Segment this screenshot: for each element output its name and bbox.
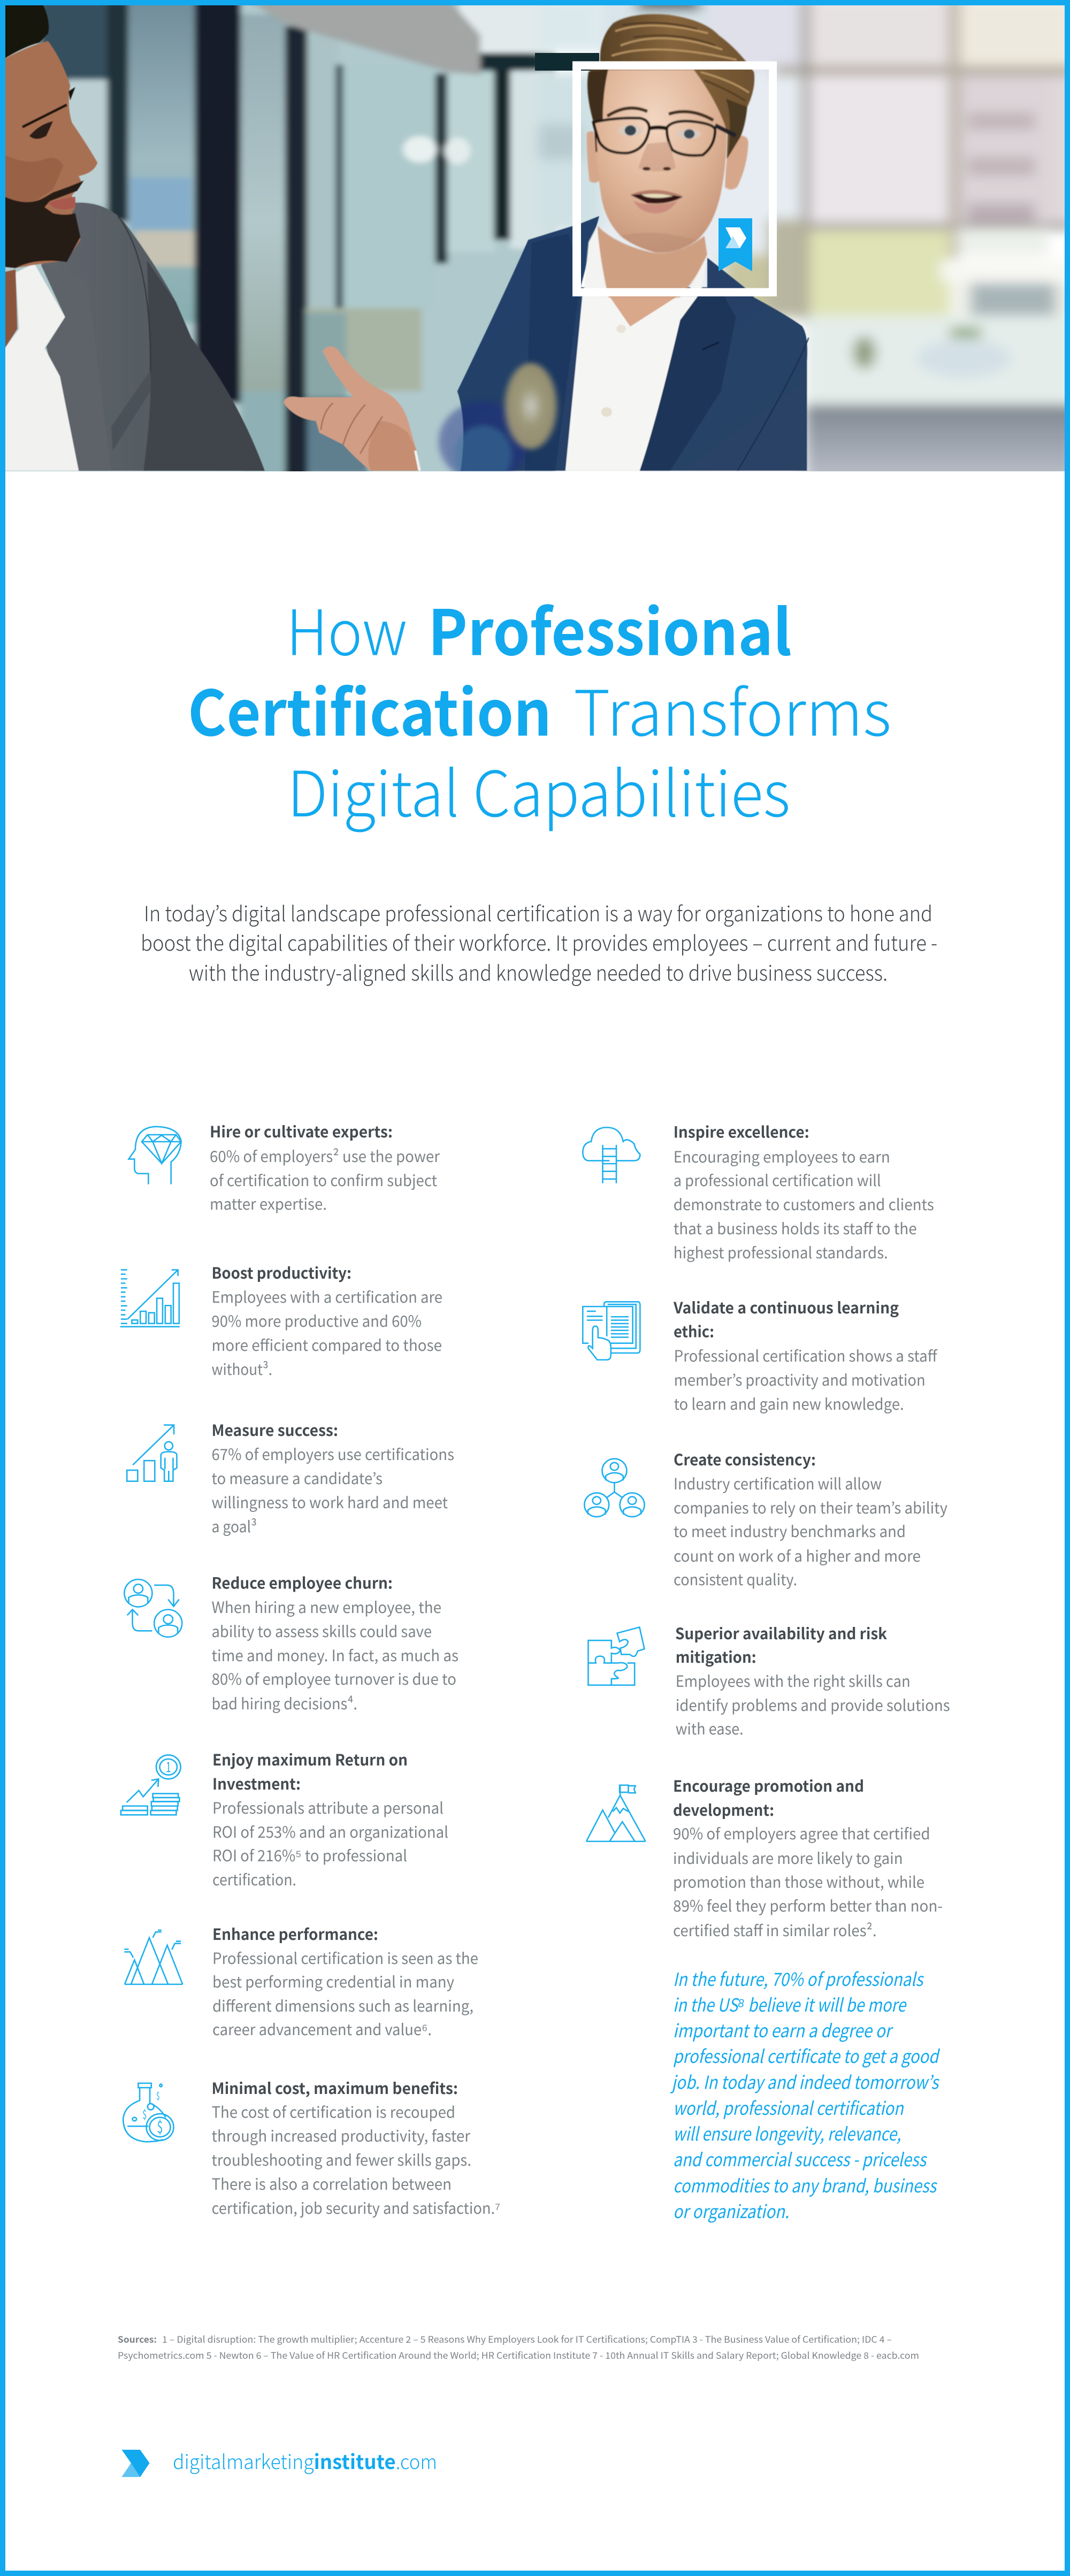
website address <box>173 2446 437 2475</box>
icon: coin stacks and rising arrow <box>121 1755 181 1815</box>
closing italic statement: will ensure longevity, relevance, <box>673 2120 901 2146</box>
icon: head with diamond <box>129 1127 181 1184</box>
closing italic statement: professional certificate to get a good <box>673 2042 940 2068</box>
text block: Inspire excellence: <box>674 1120 809 1143</box>
text block: ROI of 253% and an organizational <box>212 1820 448 1843</box>
text block: mitigation: <box>676 1645 756 1668</box>
text block: consistent quality. <box>674 1568 797 1590</box>
icon: flask with dollar coin: $ <box>142 2106 147 2122</box>
icon: bar chart with arrow <box>120 1270 180 1327</box>
text block: willingness to work hard and meet <box>212 1490 448 1513</box>
text block: Encouraging employees to earn <box>674 1145 890 1167</box>
text block: through increased productivity, faster <box>212 2124 471 2146</box>
text block: identify problems and provide solutions <box>676 1693 950 1716</box>
benefit: create consistency <box>584 1448 947 1590</box>
icon: three peaks <box>124 1930 182 1984</box>
text block: Industry certification will allow <box>674 1472 882 1494</box>
closing italic statement: world, professional certification <box>673 2094 904 2120</box>
text block: ability to assess skills could save <box>212 1619 432 1642</box>
benefit: encourage promotion <box>586 1774 943 1941</box>
text block <box>675 1622 950 1739</box>
text block <box>210 1120 440 1214</box>
text block: Professional certification is seen as the <box>212 1946 478 1969</box>
text block: Minimal cost, maximum benefits: <box>212 2076 458 2099</box>
icon: coin stacks and rising arrow: 1 <box>166 1756 171 1777</box>
closing italic statement: commodities to any brand, business <box>673 2172 938 2198</box>
closing italic statement: job. In today and indeed tomorrow’s <box>670 2068 940 2094</box>
text block: Employees with the right skills can <box>676 1669 911 1692</box>
text block: to learn and gain new knowledge. <box>674 1392 904 1415</box>
text block: Create consistency: <box>674 1448 816 1470</box>
photo background: right street and building <box>538 0 1070 481</box>
text block: a goal³ <box>212 1515 257 1537</box>
closing italic statement: in the US⁸ believe it will be more <box>673 1991 907 2017</box>
title: Transforms <box>574 663 891 754</box>
text block <box>674 1448 947 1590</box>
text block: ROI of 216%⁵ to professional <box>212 1844 407 1866</box>
left man: profile with beard and grey suit <box>2 0 265 471</box>
title: Certification <box>188 663 552 754</box>
text block: certification. <box>212 1868 296 1890</box>
text block: a professional certification will <box>674 1168 881 1191</box>
text block: to meet industry benchmarks and <box>674 1519 906 1542</box>
closing italic statement <box>670 1965 940 2223</box>
icon: tablet, document and pointing hand <box>583 1302 640 1360</box>
text block: 67% of employers use certifications <box>212 1442 454 1465</box>
text block: Enhance performance: <box>212 1922 378 1945</box>
closing italic statement: important to earn a degree or <box>673 2016 893 2043</box>
text block: There is also a correlation between <box>212 2172 452 2195</box>
text block: that a business holds its staff to the <box>674 1217 917 1239</box>
white photo frame <box>572 61 777 296</box>
text block: of certification to confirm subject <box>210 1168 437 1191</box>
text block: 89% feel they perform better than non- <box>673 1894 943 1916</box>
text block: certification, job security and satisfaction.⁷ <box>212 2196 500 2219</box>
text block: member’s proactivity and motivation <box>674 1368 926 1390</box>
text block: to measure a candidate’s <box>212 1466 383 1489</box>
benefit: measure success <box>127 1418 454 1537</box>
text block: Boost productivity: <box>212 1261 351 1283</box>
sources: 1 – Digital disruption: The growth multiplier; Accenture 2 – 5 Reasons Why Employers Look for IT Certifications; CompTIA 3 - The Business Value of Certification; IDC 4 – <box>162 2332 892 2345</box>
icon: person beside rising bars <box>127 1425 177 1481</box>
text block: with ease. <box>676 1717 744 1739</box>
text block: troubleshooting and fewer skills gaps. <box>212 2148 471 2170</box>
benefit: availability and risk mitigation <box>588 1622 950 1739</box>
icon: jigsaw puzzle <box>588 1627 645 1685</box>
benefit: inspire excellence <box>583 1120 934 1263</box>
benefit: reduce employee churn <box>124 1571 458 1714</box>
text block: 90% more productive and 60% <box>212 1309 422 1332</box>
text block: time and money. In fact, as much as <box>212 1644 458 1666</box>
text block <box>212 1571 458 1714</box>
text block: Validate a continuous learning <box>673 1296 899 1318</box>
text block: individuals are more likely to gain <box>673 1846 903 1869</box>
right man: head with glasses <box>583 14 754 297</box>
sources: Psychometrics.com 5 - Newton 6 – The Value of HR Certification Around the World; HR Certification Institute 7 - 10th Annual IT Skills and Salary Report; Global Knowledge 8 - eacb.com <box>118 2348 919 2361</box>
benefit: hire or cultivate experts <box>129 1120 440 1214</box>
icon: mountain with flag <box>586 1785 646 1841</box>
text block: Enjoy maximum Return on <box>212 1748 408 1770</box>
icon: flask with dollar coin <box>123 2083 174 2142</box>
header photo: two businessmen talking <box>0 0 1070 485</box>
text block: Measure success: <box>212 1418 338 1441</box>
benefit: enhance performance <box>124 1922 478 2040</box>
text block: different dimensions such as learning, <box>212 1994 473 2016</box>
text block: Professional certification shows a staff <box>674 1344 938 1366</box>
text block: Superior availability and risk <box>675 1622 887 1644</box>
text block: without³. <box>212 1357 272 1380</box>
text block: Reduce employee churn: <box>212 1571 393 1593</box>
closing italic statement: or organization. <box>673 2197 789 2223</box>
title: Professional <box>428 582 792 673</box>
beam behind the right man's hair <box>535 53 599 71</box>
icon: chevron mark <box>122 2450 150 2477</box>
title: Digital Capabilities <box>287 744 790 835</box>
text block: Employees with a certification are <box>212 1285 442 1308</box>
text block: ethic: <box>674 1319 714 1342</box>
right man: navy jacket and white shirt <box>457 216 808 471</box>
benefit: minimal cost <box>123 2076 500 2219</box>
text block: matter expertise. <box>210 1192 327 1214</box>
text block: 80% of employee turnover is due to <box>212 1667 456 1690</box>
closing italic statement: In the future, 70% of professionals <box>673 1965 924 1991</box>
text block <box>212 1418 454 1537</box>
sources: Sources: <box>118 2332 157 2345</box>
text block: certified staff in similar roles². <box>673 1918 876 1941</box>
text block <box>673 1774 943 1941</box>
text block: career advancement and value⁶. <box>212 2017 432 2040</box>
text block <box>212 1748 448 1890</box>
text block <box>212 2076 500 2219</box>
ribbon badge with chevron <box>719 218 752 271</box>
intro paragraph: boost the digital capabilities of their workforce. It provides employees – current and future - <box>141 927 937 957</box>
gesturing hand <box>284 346 421 471</box>
text block: best performing credential in many <box>212 1970 454 1992</box>
benefit: return on investment <box>121 1748 448 1890</box>
photo background: left glass office <box>0 0 555 483</box>
text block: demonstrate to customers and clients <box>674 1193 934 1215</box>
text block: The cost of certification is recouped <box>212 2100 455 2123</box>
icon: flask with dollar coin: $ <box>156 2089 160 2103</box>
icon: flask with dollar coin: $ <box>157 2115 163 2138</box>
text block: Hire or cultivate experts: <box>210 1120 393 1142</box>
title: How <box>286 582 407 673</box>
text block: Investment: <box>212 1772 301 1794</box>
text block: companies to rely on their team’s ability <box>674 1496 947 1518</box>
text block: bad hiring decisions⁴. <box>212 1692 357 1714</box>
benefit: validate continuous learning <box>583 1296 938 1415</box>
text block: more efficient compared to those <box>212 1333 442 1356</box>
intro paragraph: with the industry-aligned skills and knowledge needed to drive business success. <box>189 957 888 987</box>
text block: Encourage promotion and <box>673 1774 864 1797</box>
website address: digitalmarketing <box>173 2446 314 2475</box>
intro paragraph: In today’s digital landscape professional certification is a way for organizations to hone and <box>144 898 933 928</box>
sources <box>118 2332 919 2361</box>
benefit: boost productivity <box>120 1261 442 1380</box>
lens flare <box>439 363 557 485</box>
icon: two people swapping <box>124 1579 182 1637</box>
footer logo <box>122 2446 437 2477</box>
text block <box>212 1261 442 1380</box>
icon: three connected people <box>584 1459 645 1517</box>
text block: When hiring a new employee, the <box>212 1595 441 1618</box>
text block <box>673 1296 938 1415</box>
intro paragraph <box>141 898 937 987</box>
website address: .com <box>396 2446 437 2475</box>
text block: 90% of employers agree that certified <box>673 1822 930 1844</box>
closing italic statement: and commercial success - priceless <box>673 2145 928 2172</box>
title <box>188 582 891 835</box>
text block: count on work of a higher and more <box>674 1544 921 1566</box>
website address: institute <box>314 2446 396 2475</box>
text block: promotion than those without, while <box>673 1870 924 1893</box>
icon: cloud with ladder <box>583 1127 640 1183</box>
text block: highest professional standards. <box>674 1241 888 1263</box>
text block: 60% of employers² use the power <box>210 1144 440 1167</box>
text block: development: <box>673 1798 774 1821</box>
text block <box>212 1922 478 2040</box>
text block <box>674 1120 934 1263</box>
text block: Professionals attribute a personal <box>212 1796 444 1818</box>
